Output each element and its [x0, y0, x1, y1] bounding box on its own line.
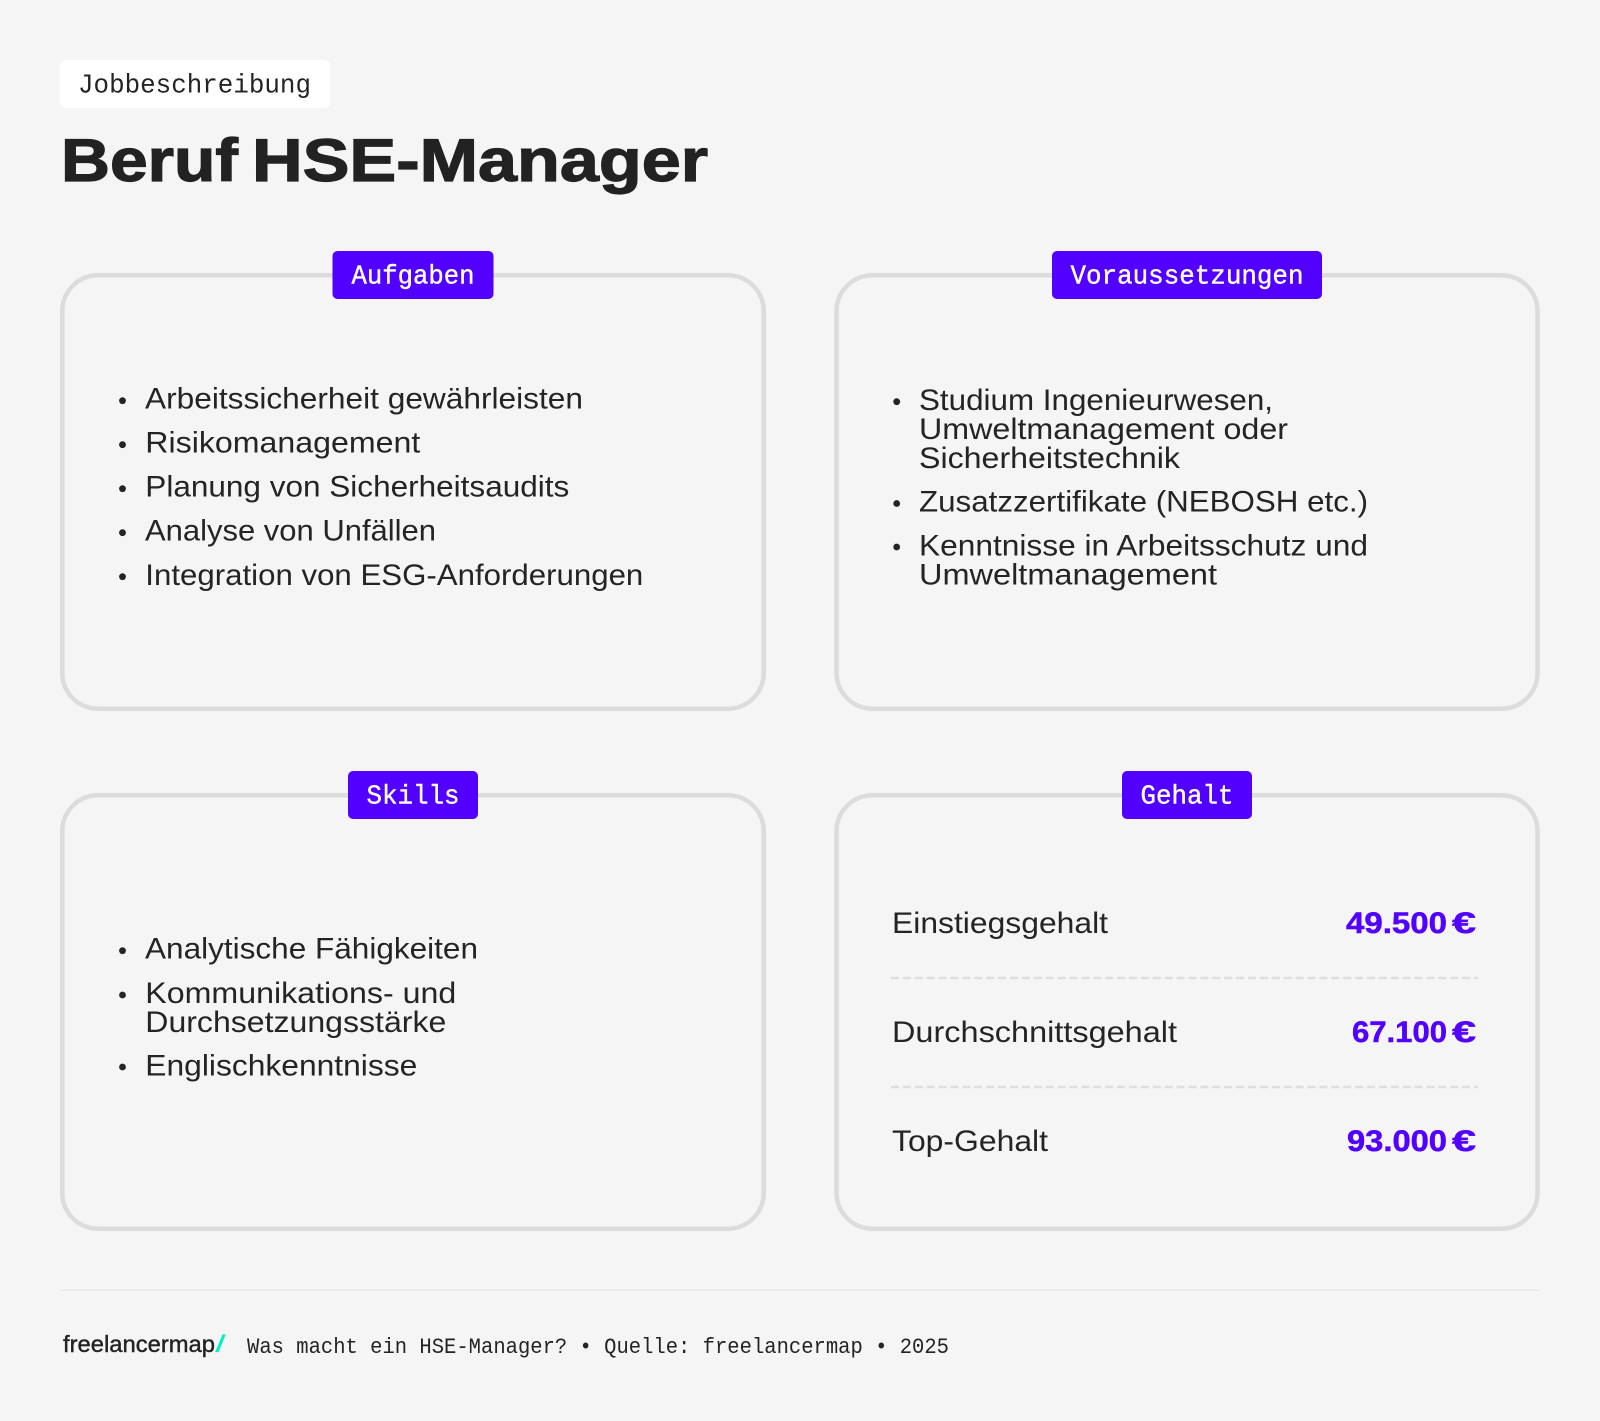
tag: Voraussetzungen: [1052, 251, 1322, 299]
salary row: Durchschnittsgehalt: Durchschnittsgehalt: [892, 1016, 1178, 1049]
title: Beruf: [61, 127, 239, 194]
requirements list: Zusatzzertifikate (NEBOSH etc.): [919, 486, 1368, 519]
tag: Skills: [348, 771, 478, 819]
title: [61, 127, 708, 194]
salary row: Durchschnittsgehalt: [892, 1016, 1476, 1049]
salary row: Einstiegsgehalt: 49.500: [1346, 907, 1447, 940]
skills list: [119, 932, 478, 1082]
salary row: Einstiegsgehalt: [892, 907, 1476, 940]
panel: Aufgaben: [62, 251, 764, 709]
salary row: Durchschnittsgehalt: €: [1452, 1016, 1476, 1049]
task list: Analyse von Unfällen: [145, 514, 436, 548]
tag: Skills: Skills: [366, 782, 460, 812]
task list: Risikomanagement: [145, 426, 421, 460]
salary row: Top-Gehalt: 93.000: [1347, 1125, 1447, 1158]
salary row: Top-Gehalt: Top-Gehalt: [892, 1125, 1049, 1158]
salary row: Einstiegsgehalt: Einstiegsgehalt: [892, 907, 1109, 940]
requirements list: Sicherheitstechnik: [919, 442, 1181, 475]
requirements list: Umweltmanagement oder: [919, 413, 1288, 446]
tag: Aufgaben: Aufgaben: [352, 262, 474, 292]
skills list: Englischkenntnisse: [145, 1049, 417, 1082]
requirements list: Umweltmanagement: [919, 558, 1218, 592]
task list: [119, 382, 643, 592]
task list: Planung von Sicherheitsaudits: [145, 470, 569, 504]
salary row: Top-Gehalt: €: [1452, 1125, 1476, 1158]
category badge: Jobbeschreibung: Jobbeschreibung: [78, 72, 311, 102]
tag: Gehalt: [1122, 771, 1252, 819]
footer logo: freelancermap: /: [216, 1331, 226, 1358]
footer logo: freelancermap: freelancermap: [63, 1331, 215, 1357]
requirements list: Studium Ingenieurwesen,: [919, 384, 1273, 417]
panel: Gehalt: [836, 771, 1538, 1229]
salary row: Top-Gehalt: [892, 1125, 1476, 1158]
skills list: Durchsetzungsstärke: [145, 1006, 446, 1039]
requirements list: Kenntnisse in Arbeitsschutz und: [919, 530, 1368, 562]
panel: Voraussetzungen: [836, 251, 1538, 709]
tag: Aufgaben: [332, 251, 494, 299]
title: HSE-Manager: [252, 127, 708, 194]
requirements list: [893, 384, 1368, 592]
task list: Arbeitssicherheit gewährleisten: [145, 382, 583, 416]
panel: Skills: [62, 771, 764, 1229]
tag: Gehalt: Gehalt: [1140, 782, 1234, 812]
tag: Voraussetzungen: Voraussetzungen: [1070, 262, 1304, 292]
category badge: Jobbeschreibung: [60, 60, 330, 108]
task list: Integration von ESG-Anforderungen: [145, 559, 643, 592]
skills list: Analytische Fähigkeiten: [145, 932, 478, 966]
salary row: Einstiegsgehalt: €: [1452, 907, 1476, 940]
salary row: Durchschnittsgehalt: 67.100: [1352, 1016, 1447, 1049]
skills list: Kommunikations- und: [145, 977, 456, 1010]
footer source text: Was macht ein HSE-Manager? • Quelle: freelancermap • 2025: [247, 1335, 949, 1360]
